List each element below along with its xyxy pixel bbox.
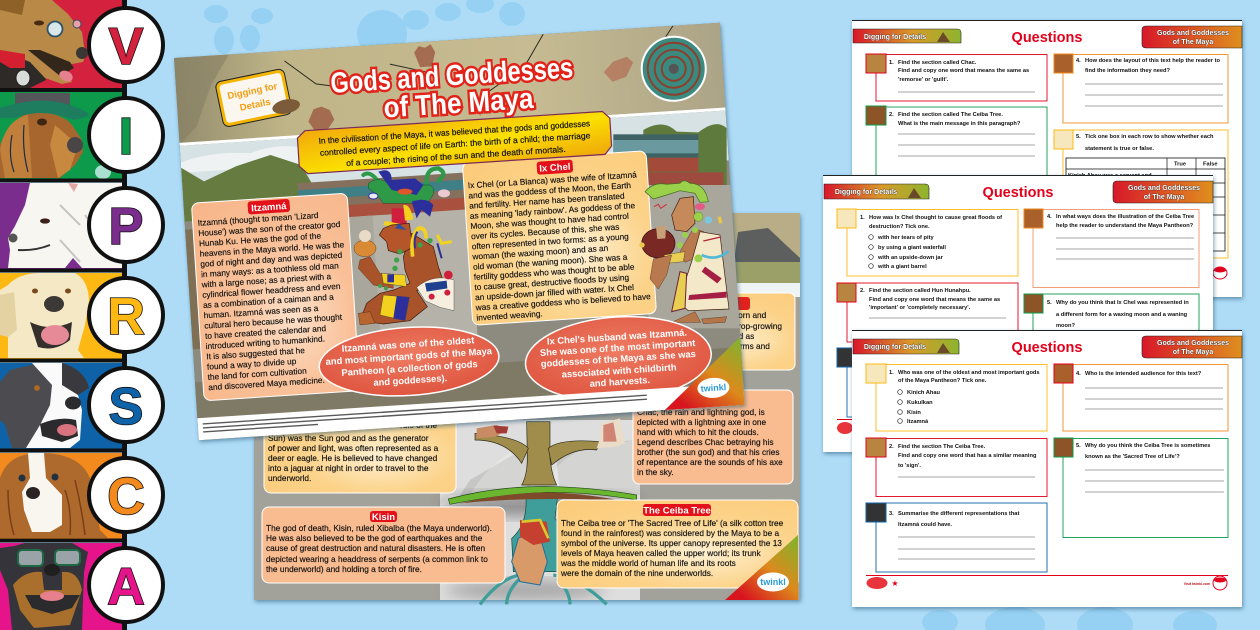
header: Questions <box>1012 30 1082 46</box>
question 2: to 'sign'. <box>898 463 921 469</box>
callout: Ix Chel oval: She was one of the most important <box>540 337 696 358</box>
header: Digging for Details <box>864 34 926 41</box>
question 3 <box>866 503 1047 572</box>
callout: Itzamná oval: and goddesses). <box>373 372 448 388</box>
panel: Ix Chel: and fertility. Her name has been translated <box>469 191 625 211</box>
question 1: 1. <box>860 215 865 221</box>
panel: Itzamná: Hunab Ku. He was the god of the <box>199 230 322 248</box>
panel: Kinich Ahau: underworld. <box>268 473 311 483</box>
panel: Kinich Ahau: deer or eagle. He is believed to have changed <box>268 453 438 463</box>
panel: Itzamná: introduced writing to humankind. <box>205 333 325 351</box>
question 2 <box>837 283 1018 342</box>
question 3: Summarise the different representations that <box>898 511 1019 517</box>
letter I <box>89 98 163 172</box>
corner and twinkl logo: twinkl <box>700 382 726 394</box>
question 1: Find the section called Chac. <box>898 60 977 66</box>
question 4: 4. <box>1076 371 1081 377</box>
panel: Kinich Ahau: rule of the <box>400 420 437 430</box>
panel: Kisin: depicted wearing a headdress of serpents (a common link to <box>266 554 488 564</box>
panel: Kinich Ahau: Sun) was the Sun god and as the generator <box>268 433 429 443</box>
question 2: Find the section The Ceiba Tree. <box>898 444 986 450</box>
panel: Itzamná: and discovered Maya medicine. <box>208 375 325 392</box>
letter A <box>89 548 163 622</box>
panel: Kisin: the underworld) and holding a torch of fire. <box>266 564 422 574</box>
question 1: with an upside-down jar <box>877 255 944 261</box>
panel: Ix Chel: fertility goddess who was thought to be able <box>473 262 635 282</box>
panel: The Ceiba Tree <box>557 500 798 588</box>
VIPERS strip <box>0 0 163 630</box>
letter P <box>89 188 163 262</box>
panel: Itzamná: human. Itzamná was seen as a <box>203 303 319 320</box>
icon: Maya calendar <box>640 35 708 103</box>
scene: temple and trees behind Ix Chel <box>613 124 745 328</box>
question 5: known as the 'Sacred Tree of Life'? <box>1085 454 1180 460</box>
question 2: 2. <box>889 112 894 118</box>
question 1: How was Ix Chel thought to cause great floods of <box>869 215 1002 221</box>
panel: Ix Chel: Ix Chel (or La Blanca) was the wife of Itzamná <box>468 169 637 190</box>
footer strip <box>197 383 745 440</box>
panel: The Ceiba Tree: The Ceiba Tree <box>643 506 711 516</box>
panel: upper right fragment: corn and <box>734 310 767 320</box>
letter V <box>89 8 163 82</box>
question 1: 'remorse' or 'guilt'. <box>898 77 949 83</box>
letter V: V <box>109 18 144 76</box>
badge: Digging for Details: Details <box>239 97 272 114</box>
poster page 1 (front, tilted) <box>174 22 763 440</box>
panel: upper right fragment <box>640 293 795 370</box>
question 1: 1. <box>889 60 894 66</box>
question 5: moon? <box>1056 323 1075 329</box>
letter P: P <box>109 198 143 256</box>
poster page 2 (behind) <box>254 213 800 604</box>
panel: The Ceiba Tree: The Ceiba tree or 'The Sacred Tree of Life' (a silk cotton tree <box>561 518 784 528</box>
row: S border collie <box>0 363 122 449</box>
panel: Kinich Ahau: into a jaguar at night in order to travel to the <box>268 463 429 473</box>
question 1 <box>837 209 1018 276</box>
title <box>329 58 574 120</box>
question 1: with her tears of pity <box>877 235 934 241</box>
letter S: S <box>109 378 143 436</box>
panel: Kisin: cause of great destruction and natural disasters. He is often <box>266 543 485 553</box>
question 4: Who is the intended audience for this text? <box>1085 371 1202 377</box>
question 1: Kisin <box>907 410 921 416</box>
question 5 with table: True <box>1174 162 1186 168</box>
panel: Ix Chel: was a creative goddess who is believed to have <box>474 291 651 313</box>
panel: Kisin: Kisin <box>372 512 395 523</box>
question 2: 2. <box>860 288 865 294</box>
question 2: 2. <box>889 444 894 450</box>
panel: Itzamná: god of night and day and was depicted <box>200 250 343 269</box>
question 1: Kinich Ahau <box>907 390 940 396</box>
corner and twinkl logo <box>660 337 745 410</box>
question 1: Itzamná <box>907 419 929 425</box>
question 2 <box>866 438 1047 496</box>
panel: upper right fragment: farms and <box>733 341 770 351</box>
row: I dog with hat <box>0 92 122 179</box>
panel: Itzamná: It is also suggested that he <box>206 345 306 361</box>
corner and twinkl logo <box>725 535 798 600</box>
question 4: find the information they need? <box>1085 68 1171 74</box>
question 1: of the Maya Pantheon? Tick one. <box>898 378 987 384</box>
corner and twinkl logo: twinkl <box>760 577 786 587</box>
callout: Itzamná oval <box>318 326 500 397</box>
header: Questions <box>1012 340 1082 356</box>
intro banner: of a couple; the rising of the sun and the death of mortals. <box>346 144 566 168</box>
question 5 with table: Tick one box in each row to show whether each <box>1085 134 1214 140</box>
panel: Itzamná: found a way to divide up <box>207 356 297 372</box>
header: of The Maya <box>1173 349 1213 356</box>
panel: The Ceiba Tree: symbol of the universe. Its upper canopy represented the 13 <box>561 538 782 548</box>
panel: Itzamná: to have created the calendar and <box>205 323 327 341</box>
figure: Itzamná <box>354 168 454 325</box>
panel: Ix Chel: to cause great, destructive floods by using <box>474 272 630 292</box>
panel: Chac: Chac, the rain and lightning god, is <box>637 407 765 417</box>
badge: Digging for Details <box>215 66 301 128</box>
question 3: Itzamná could have. <box>898 522 952 528</box>
panel: Kinich Ahau: of power and light, was often represented as a <box>268 443 439 453</box>
letter A: A <box>107 558 145 616</box>
callout: Ix Chel oval: Ix Chel's husband was Itzamná. <box>547 326 687 347</box>
callout: Ix Chel oval <box>524 316 712 395</box>
panel: Ix Chel: an upside-down jar filled with water. Ix Chel <box>475 282 634 302</box>
question 3: 3. <box>889 511 894 517</box>
footer: Visit twinkl.com <box>1184 582 1210 586</box>
row: A rottweiler with glasses <box>0 543 122 630</box>
letter C: C <box>107 468 145 526</box>
panel: Itzamná: the land for corn cultivation <box>207 366 307 382</box>
row: V dog with round glasses <box>0 0 122 88</box>
question 5 with table <box>1054 130 1228 258</box>
panel: The Ceiba Tree: was the middle world of human life and its roots <box>560 558 736 568</box>
question 2: Find and copy one word that means the same as <box>869 297 1000 303</box>
panel: Chac: in the sky. <box>637 467 674 477</box>
panel: Kisin: He was also believed to be the god of earthquakes and the <box>266 533 483 543</box>
panel: Itzamná: with a large nose; as a priest with a <box>200 271 332 290</box>
footer logo <box>1213 267 1227 279</box>
letter R <box>89 278 163 352</box>
header: Gods and Goddesses <box>1157 30 1229 37</box>
header: Gods and Goddesses <box>1128 185 1200 192</box>
question 5: 5. <box>1047 300 1052 306</box>
footer: ★ <box>891 579 899 588</box>
question 2: 'important' or 'completely necessary'. <box>869 305 971 311</box>
question 4 <box>1024 209 1199 288</box>
intro banner: In the civilisation of the Maya, it was believed that the gods and goddesses <box>318 118 590 146</box>
header: of The Maya <box>1144 194 1184 201</box>
question 4 <box>1054 54 1228 123</box>
question 4: 4. <box>1076 58 1081 64</box>
question 5 with table: Kinich Ahau was a servant and <box>1068 173 1152 179</box>
intro banner <box>297 111 612 174</box>
header: Questions <box>983 185 1053 201</box>
panel: The Ceiba Tree: were the domain of the nine underworlds. <box>560 568 713 578</box>
question 1: Find and copy one word that means the same as <box>898 68 1029 74</box>
panel: The Ceiba Tree: found in the rainforest) was considered by the Maya to be a <box>561 528 780 538</box>
question 5: a different form for a waxing moon and a waning <box>1056 312 1188 318</box>
badge: Digging for Details: Digging for <box>227 81 279 102</box>
tree of life <box>448 418 637 604</box>
panel: Ix Chel: invented weaving. <box>476 308 543 323</box>
question 1: Who was one of the oldest and most important gods <box>898 370 1040 376</box>
question 4: In what ways does the illustration of the Ceiba Tree <box>1056 214 1194 220</box>
question 1 <box>866 54 1047 101</box>
letter I: I <box>119 108 133 166</box>
panel: Chac: Legend describes Chac betraying his <box>637 437 774 447</box>
panel: Chac <box>633 390 793 484</box>
panel: The Ceiba Tree: levels of Maya heaven called the upper world; its trunk <box>561 548 762 558</box>
figure: Ix Chel <box>639 181 729 324</box>
worksheet B <box>823 175 1213 452</box>
header <box>853 336 1242 358</box>
header <box>853 26 1242 48</box>
worksheet A <box>852 20 1242 297</box>
panel: Itzamná: cylindrical flower headdress and even <box>202 281 341 300</box>
question 2 <box>866 106 1047 207</box>
header: Digging for Details <box>864 344 926 351</box>
question 5: Why do you think the Ceiba Tree is sometimes <box>1085 443 1210 449</box>
panel: Itzamná <box>191 193 360 401</box>
question 1: by using a giant waterfall <box>878 245 946 251</box>
panel: Kisin: The god of death, Kisin, ruled Xibalba (the Maya underworld). <box>266 523 492 533</box>
callout: Itzamná oval: Itzamná was one of the oldest <box>341 334 475 354</box>
question 5: Why do you think that Ix Chel was represented in <box>1056 300 1189 306</box>
header: Gods and Goddesses <box>1157 340 1229 347</box>
intro banner: controlled every aspect of life on Earth: the birth of a child; the marriage <box>320 130 591 158</box>
title: Gods and Goddesses <box>329 52 574 100</box>
question 4: How does the layout of this text help the reader to <box>1085 58 1220 64</box>
question 5 <box>1054 438 1228 538</box>
panel: Ix Chel <box>462 151 656 325</box>
question 1: Kukulkan <box>907 400 933 406</box>
header: Digging for Details <box>835 189 897 196</box>
question 1: 1. <box>889 370 894 376</box>
question 2: What is the main message in this paragraph? <box>898 121 1021 127</box>
question 5 <box>1024 294 1199 364</box>
panel: Kisin <box>262 507 505 583</box>
question 3 <box>837 348 1018 417</box>
panel: Itzamná: Itzamná (thought to mean 'Lizard <box>197 210 319 228</box>
row: R golden dog <box>0 273 122 359</box>
callout: Itzamná oval: Pantheon (a collection of gods <box>341 358 478 378</box>
panel: Itzamná: cultural hero because he was thought <box>204 312 343 331</box>
question 5 with table: statement is true or false. <box>1085 146 1154 152</box>
panel: Ix Chel: Ix Chel <box>539 162 571 175</box>
question 5 with table: 5. <box>1076 134 1081 140</box>
panel: Chac: hand with which to hit the clouds. <box>637 427 759 437</box>
panel: Ix Chel: often represented in two forms: as a young <box>471 231 629 251</box>
panel: Itzamná: heavens in the Maya world. He was the <box>199 239 345 259</box>
panel: Itzamná: Itzamná <box>251 201 288 214</box>
header <box>824 181 1213 203</box>
row: P white dog <box>0 183 122 270</box>
panel: Chac: of repentance are the sounds of his axe <box>637 457 783 467</box>
question 2: Find the section called The Ceiba Tree. <box>898 112 1003 118</box>
question 4 <box>1054 364 1228 431</box>
panel: Itzamná: as a combination of a caiman and a <box>203 292 334 310</box>
question 2: Find and copy one word that has a similar meaning <box>898 453 1037 459</box>
question 2: Find the section called Hun Hunahpu. <box>869 288 971 294</box>
question 4: help the reader to understand the Maya Pantheon? <box>1056 223 1194 229</box>
letter S <box>89 368 163 442</box>
question 1: with a giant barrel <box>877 264 927 270</box>
row: C spaniel <box>0 453 122 539</box>
panel: Chac: depicted with a lightning axe in one <box>637 417 767 427</box>
panel: Itzamná: House') was the son of the creator god <box>198 219 341 238</box>
worksheet C <box>852 330 1242 607</box>
panel: upper right fragment: planted as <box>716 331 754 341</box>
scene: sky, forest, temple and courtyard <box>180 111 743 418</box>
callout: Ix Chel oval: and harvests. <box>589 374 650 389</box>
panel: Kinich Ahau <box>264 400 456 493</box>
question 4: 4. <box>1047 214 1052 220</box>
letter C <box>89 458 163 532</box>
scene: header, pyramid and courtyard <box>437 213 800 600</box>
panel: Itzamná: in many ways: as a toothless old man <box>201 260 339 279</box>
scene: stone header <box>174 23 726 146</box>
panel: Chac: brother (the sun god) and that his cries <box>637 447 780 457</box>
question 1: destruction? Tick one. <box>869 224 930 230</box>
panel: Ix Chel: woman (the waxing moon) and as an <box>471 243 609 262</box>
panel: Ix Chel: and was the goddess of the Moon, the Earth <box>468 180 632 200</box>
callout: Itzamná oval: and most important gods of the Maya <box>325 345 493 367</box>
footer <box>866 575 1228 590</box>
question 5: 5. <box>1076 443 1081 449</box>
question 5 with table: False <box>1203 162 1218 168</box>
question 1 <box>866 364 1047 431</box>
callout: Ix Chel oval: goddesses of the Maya as she was <box>540 348 696 369</box>
panel: Ix Chel: over its cycles. Because of this, she was <box>471 222 620 241</box>
callout: Ix Chel oval: associated with childbirth <box>561 361 677 380</box>
panel: Ix Chel: old woman (the waning moon). She was a <box>473 252 628 272</box>
panel: Ix Chel: Moon, she was thought to have had control <box>470 211 629 231</box>
header: of The Maya <box>1173 39 1213 46</box>
letter R: R <box>107 288 145 346</box>
panel: upper right fragment: crop-growing <box>734 321 782 331</box>
panel: Ix Chel: as meaning 'lady rainbow'. As goddess of the <box>469 200 636 221</box>
title: of The Maya <box>383 83 535 125</box>
footer <box>837 419 1199 434</box>
